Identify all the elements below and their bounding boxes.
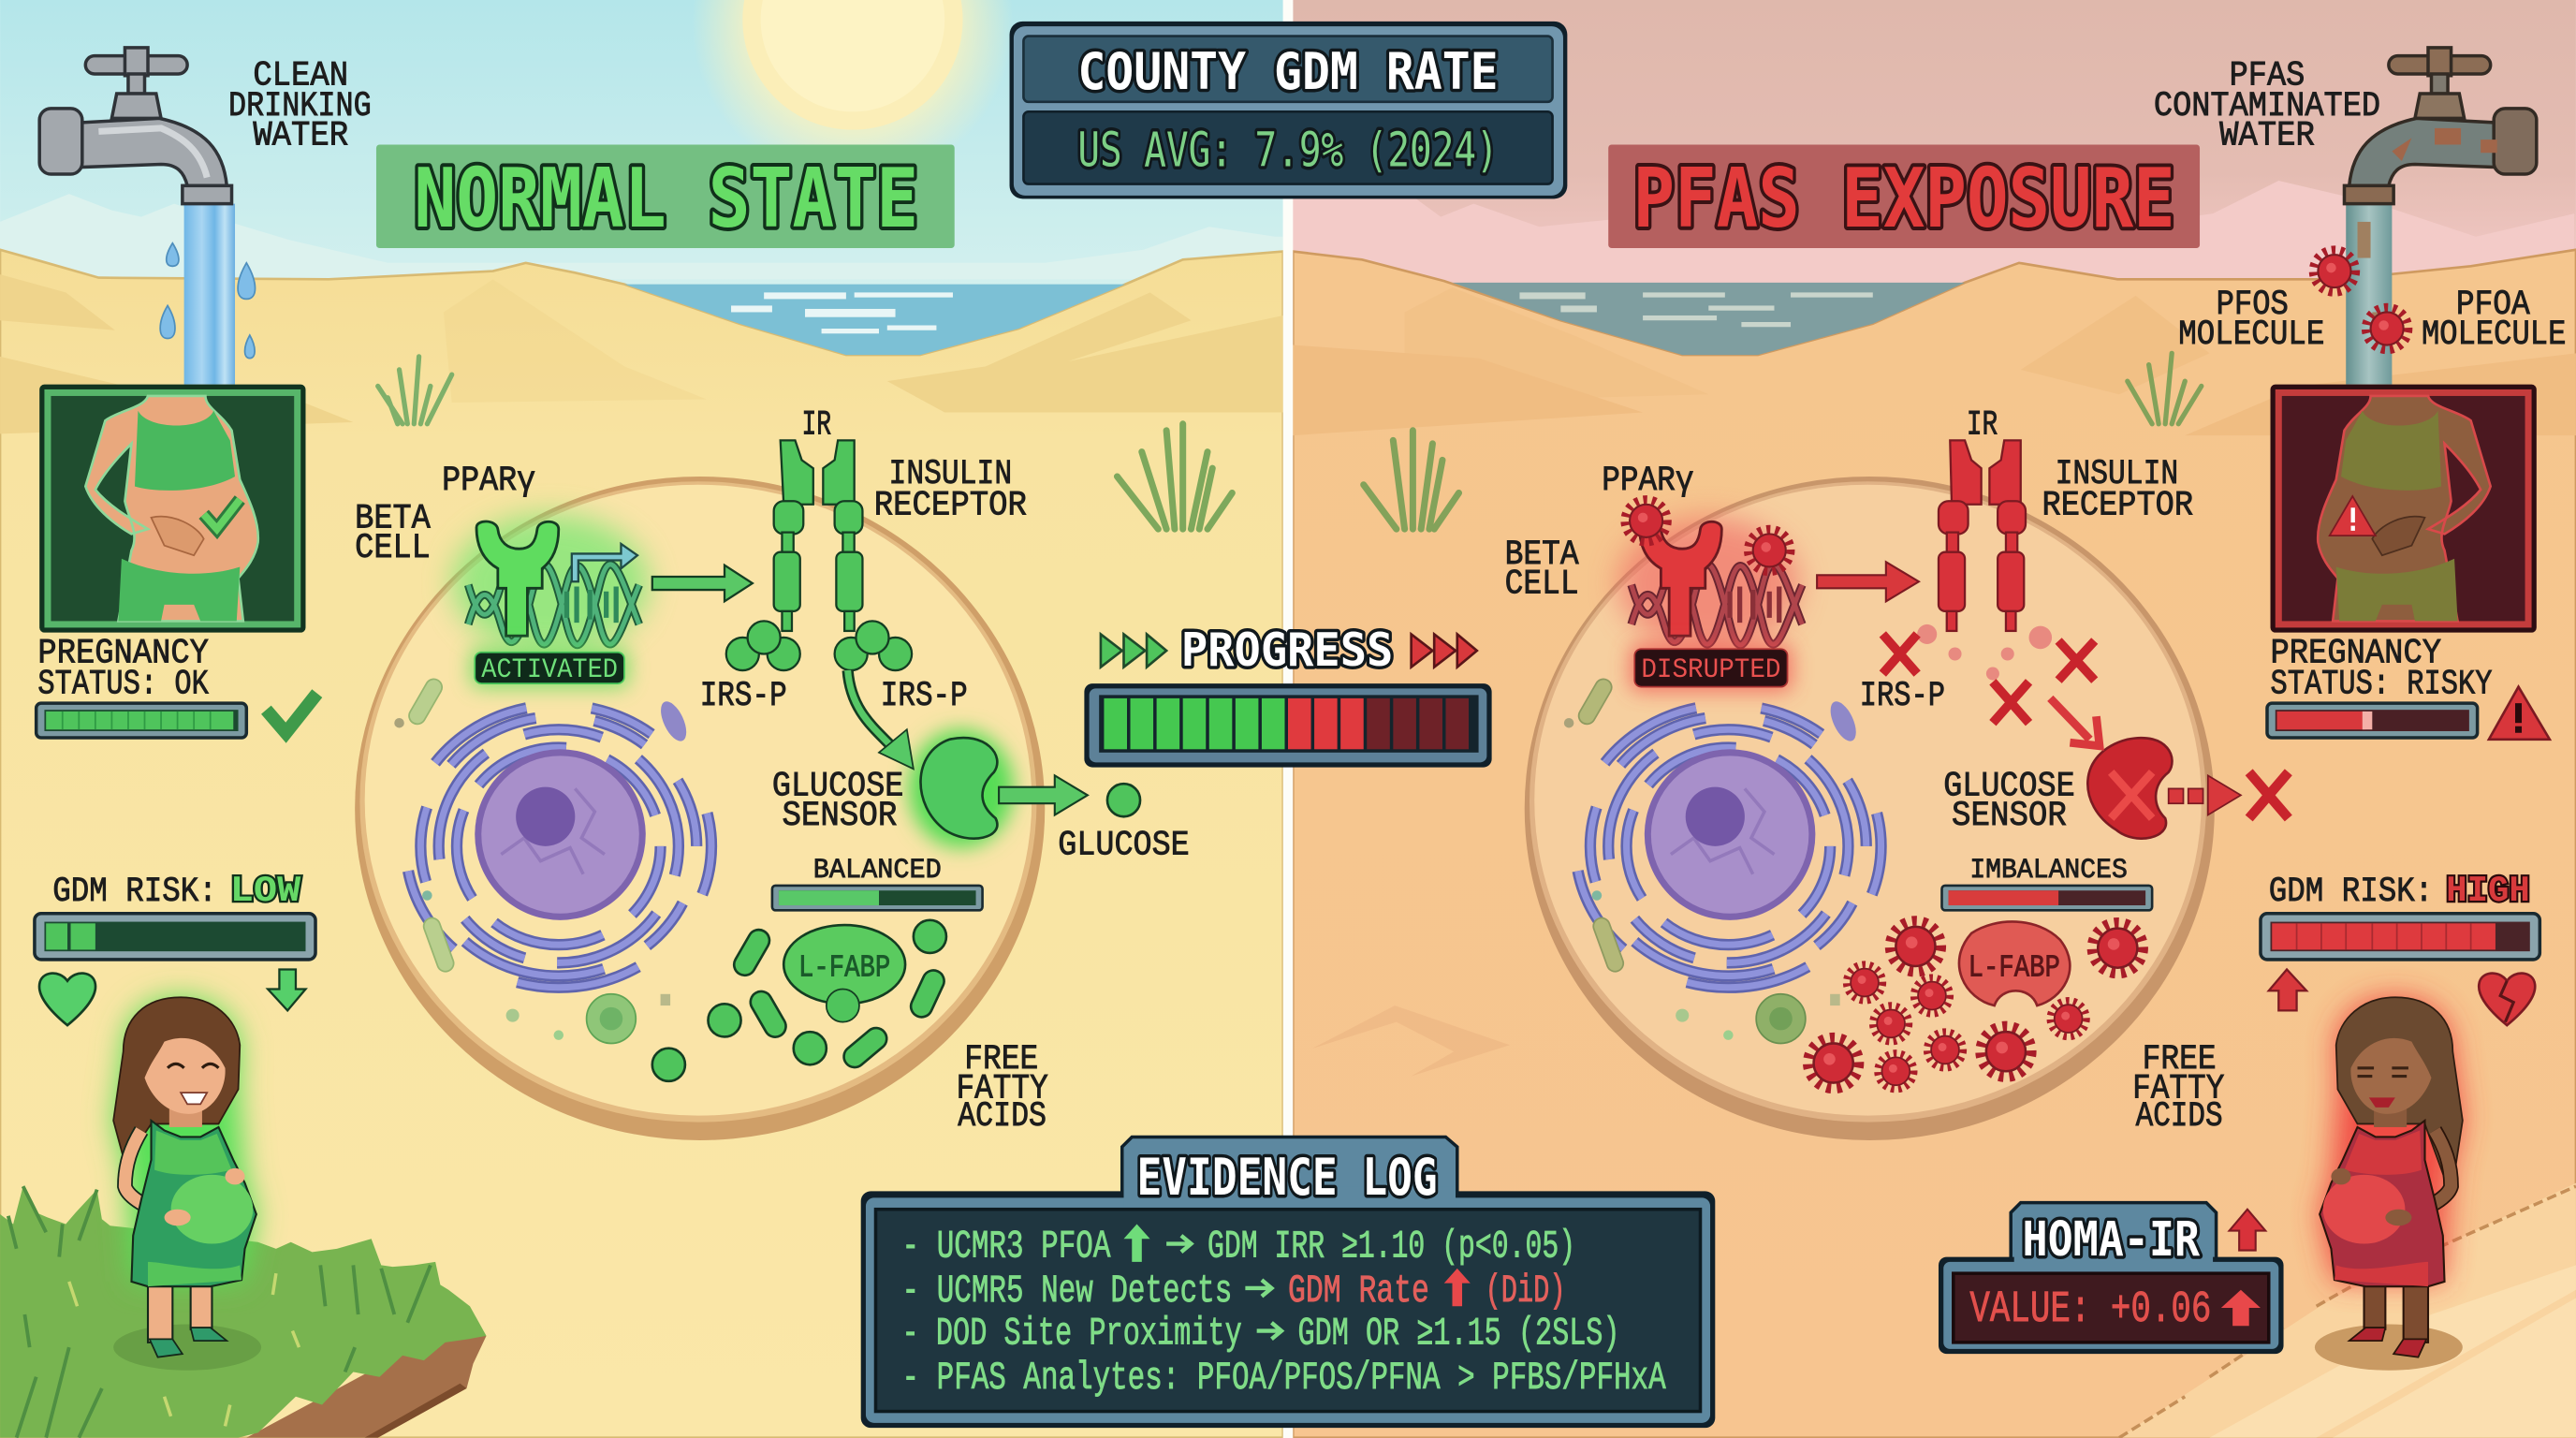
- PFAS on transcription site: [1748, 529, 1791, 572]
- PPAR gamma glow: [452, 514, 649, 653]
- US average text: US AVG: 7.9% (2024): [1077, 123, 1499, 178]
- shadow: [2315, 1325, 2463, 1371]
- label: clean drinking water: DRINKING: [228, 87, 372, 126]
- nucleus and endoplasmic reticulum: [394, 697, 711, 1040]
- labels: left cell: [355, 405, 1190, 1137]
- left clouds: [0, 194, 1283, 279]
- labels: right cell: SENSOR: [1952, 797, 2067, 836]
- warning on belly: [2330, 496, 2376, 536]
- label: pregnancy status OK: STATUS: OK: [37, 666, 210, 705]
- label: PFOA molecule: [2422, 286, 2566, 355]
- right lake: [1453, 283, 1965, 355]
- green chevrons: [1101, 634, 1166, 668]
- label: PFOA molecule: PFOA: [2456, 286, 2531, 325]
- labels: left cell: GLUCOSE: [772, 767, 903, 806]
- labels: left cell: SENSOR: [782, 797, 897, 836]
- title: EVIDENCE LOG: [1137, 1148, 1438, 1207]
- rusty faucet: [2344, 48, 2537, 204]
- water stream: [160, 204, 256, 385]
- left dunes: [0, 274, 1283, 433]
- label: GDM risk low: GDM RISK:: [52, 873, 217, 912]
- left background: sand: [0, 250, 1283, 1438]
- arm fill: [124, 1130, 178, 1217]
- labels: left cell: FATTY: [956, 1069, 1048, 1108]
- woman normal: [113, 997, 261, 1371]
- arm fill: [2398, 1130, 2452, 1217]
- label: clean drinking water: [228, 56, 372, 155]
- right dunes: [1293, 287, 2576, 435]
- panel: progress: [1084, 623, 1492, 768]
- panel: HOMA-IR: [1939, 1203, 2284, 1354]
- heading: PFAS exposure: PFAS EXPOSURE: [1633, 151, 2175, 246]
- labels: right cell: IR: [1967, 405, 1998, 445]
- icon: check OK: [266, 694, 317, 733]
- left beta cell: [355, 477, 1045, 1140]
- arm: [2398, 1130, 2452, 1217]
- icon: broken heart: [2479, 974, 2535, 1025]
- meter: GDM risk high: [2261, 914, 2539, 960]
- pale mitochondria: [406, 676, 456, 974]
- dress highlight: [148, 1130, 242, 1286]
- hand on belly: [2385, 1210, 2411, 1225]
- transcription arrow: [572, 544, 637, 581]
- line 1: GDM IRR ≥1.10 (p<0.05): [1208, 1225, 1575, 1269]
- icon: PFOA molecule: [2365, 307, 2408, 350]
- arrow to sensor: [2050, 698, 2100, 746]
- labels: left cell: CELL: [355, 529, 431, 568]
- right foreground light sand: [2119, 1183, 2576, 1438]
- glucose dot: [1107, 784, 1140, 816]
- right background: sand: [1293, 250, 2576, 1438]
- labels: right cell: RECEPTOR: [2042, 486, 2193, 525]
- panel: pregnancy status right: [2271, 385, 2537, 633]
- label: pregnancy status OK: PREGNANCY: [37, 634, 209, 673]
- neck: [2374, 1104, 2407, 1127]
- torso illustration: [2318, 396, 2491, 621]
- label: PFOS molecule: MOLECULE: [2178, 315, 2324, 355]
- insulin receptor right: [1939, 440, 2026, 631]
- right small dune: [1312, 1005, 1510, 1077]
- labels: left cell: IRS-P: [881, 677, 968, 716]
- title: HOMA-IR: [2022, 1212, 2200, 1268]
- panel: pregnancy status left: [39, 385, 305, 633]
- legs: [2364, 1284, 2428, 1343]
- dress highlight: [2334, 1130, 2428, 1286]
- icon: blocked X: [2249, 772, 2289, 818]
- chip: disrupted: DISRUPTED: [1641, 653, 1781, 685]
- line 3: GDM OR ≥1.15 (2SLS): [1298, 1312, 1620, 1357]
- nucleus and endoplasmic reticulum: [1564, 697, 1881, 1040]
- label: PFAS contaminated water: PFAS: [2230, 56, 2305, 95]
- torso illustration: [85, 396, 258, 621]
- tab: [2011, 1203, 2217, 1265]
- label: pregnancy status risky: STATUS: RISKY: [2271, 666, 2492, 705]
- neck: [169, 1104, 202, 1127]
- value arrow: [2221, 1290, 2261, 1326]
- line 3: - DOD Site Proximity: [902, 1312, 1242, 1357]
- face: [2350, 1038, 2431, 1114]
- label: PFAS contaminated water: CONTAMINATED: [2154, 87, 2380, 126]
- vesicle: [587, 994, 636, 1043]
- labels: right cell: INSULIN: [2056, 455, 2178, 494]
- frame: [1939, 1257, 2284, 1354]
- dress: [131, 1121, 256, 1286]
- labels: left cell: IRS-P: [700, 677, 787, 716]
- faucet: [39, 48, 232, 204]
- labels: right cell: CELL: [1505, 565, 1579, 605]
- value: VALUE: +0.06: [1969, 1285, 2211, 1335]
- hand on belly: [165, 1210, 191, 1225]
- label: PFOS molecule: [2178, 286, 2324, 355]
- pale mitochondria: [1575, 676, 1626, 974]
- hand top: [225, 1168, 245, 1184]
- right beta cell: [1525, 477, 2215, 1140]
- cell membrane: [1525, 477, 2215, 1140]
- icon: heart: [39, 974, 95, 1025]
- label: PFOS molecule: PFOS: [2217, 286, 2289, 325]
- label: GDM risk high: GDM RISK:: [2269, 873, 2433, 912]
- progress bar: [1084, 683, 1492, 768]
- status bar risky: [2267, 703, 2478, 738]
- smile: [181, 1093, 207, 1104]
- meter: GDM risk low: [35, 914, 315, 960]
- shoes: [150, 1328, 227, 1357]
- label: GDM risk high: HIGH: [2446, 871, 2530, 912]
- contaminated stream: [2346, 204, 2392, 385]
- signal arrow to sensor: [848, 670, 914, 769]
- label: pregnancy status risky: [2271, 634, 2492, 705]
- cell membrane: [355, 477, 1045, 1140]
- right tap: contaminated water: [2344, 48, 2537, 385]
- chip: disrupted: [1630, 644, 1793, 692]
- face: [145, 1038, 226, 1114]
- DNA left: [468, 565, 639, 645]
- icon: X on sensor: [2111, 772, 2152, 818]
- insulin receptor left: [774, 440, 862, 631]
- balanced meter: [772, 854, 983, 910]
- labels: left cell: FREE: [964, 1040, 1038, 1079]
- line 2: (DiD): [1486, 1269, 1566, 1313]
- labels: left cell: BETA: [355, 499, 432, 538]
- label: clean drinking water: CLEAN: [253, 56, 348, 95]
- outer frame: [861, 1191, 1715, 1428]
- woman exposed: [2315, 997, 2463, 1371]
- foreground grass and soil: [0, 1186, 487, 1438]
- icon: PFOS molecule: [2313, 250, 2356, 292]
- shoes: [2349, 1328, 2426, 1357]
- DNA right: [1632, 565, 1802, 645]
- arm: [124, 1130, 178, 1217]
- labels: left cell: RECEPTOR: [874, 486, 1027, 525]
- balanced meter: BALANCED: [813, 854, 942, 886]
- labels: left cell: INSULIN: [889, 455, 1012, 494]
- glucose sensor glow: [909, 729, 1014, 848]
- labels: left cell: ACIDS: [958, 1097, 1046, 1137]
- labels: right cell: BETA: [1505, 536, 1579, 575]
- labels: right cell: IRS-P: [1860, 677, 1945, 716]
- IRS-P clusters left: [726, 621, 912, 670]
- line 2: GDM Rate: [1288, 1269, 1429, 1313]
- dashed blocked arrow: [2169, 775, 2241, 814]
- labels: left cell: PPARγ: [442, 462, 535, 501]
- progress title: PROGRESS: [1181, 623, 1393, 677]
- woman exposed glow: [2320, 997, 2463, 1282]
- L-FABP protein disrupted: [1959, 921, 2070, 1005]
- label: clean drinking water: WATER: [253, 116, 348, 155]
- belly: [171, 1175, 253, 1244]
- broken IRS-P debris and X marks: [1882, 624, 2095, 723]
- tired eyes: [2358, 1068, 2408, 1077]
- fatty acid organelles: [652, 920, 947, 1081]
- left lake: [624, 285, 1125, 355]
- labels: right cell: FREE: [2143, 1040, 2217, 1079]
- label: PFAS contaminated water: WATER: [2219, 116, 2315, 155]
- label: GDM risk low: LOW: [230, 871, 301, 912]
- mouth: [2369, 1097, 2395, 1108]
- icon: sun: [692, 0, 1014, 184]
- icon: arrow down: [268, 969, 305, 1010]
- hair: [2336, 997, 2463, 1196]
- PPAR gamma glow right: [1618, 518, 1799, 649]
- tab: [1122, 1137, 1457, 1201]
- left grass tufts: [378, 357, 1232, 529]
- PPAR gamma receptor right: [1640, 521, 1721, 636]
- belly: [2323, 1175, 2405, 1244]
- labels: left cell: IR: [802, 405, 831, 445]
- right grass tufts: [1364, 353, 2202, 529]
- shadow: [113, 1325, 261, 1371]
- heading: normal state: NORMAL STATE: [414, 151, 918, 246]
- line 4: - PFAS Analytes: PFOA/PFOS/PFNA > PFBS/PFHxA: [902, 1356, 1666, 1401]
- labels: right cell: ACIDS: [2136, 1097, 2223, 1137]
- label: GDM risk high: [2269, 871, 2530, 912]
- glucose sensor disrupted: [2087, 738, 2172, 839]
- label: pregnancy status risky: PREGNANCY: [2271, 634, 2441, 673]
- icon: warning: [2489, 687, 2550, 740]
- labels: left cell: GLUCOSE: [1058, 827, 1190, 866]
- right background: sky: [1293, 0, 2576, 287]
- icon: HOMA-IR rising arrow: [2230, 1210, 2265, 1251]
- L-FABP protein disrupted: L-FABP: [1969, 950, 2060, 986]
- PPAR gamma receptor left: [476, 521, 559, 636]
- line 2: [902, 1269, 1566, 1313]
- labels: right cell: FATTY: [2132, 1069, 2224, 1108]
- PFAS particles in cell: [1808, 921, 2144, 1090]
- label: PFAS contaminated water: [2154, 56, 2380, 155]
- legs: [148, 1284, 212, 1343]
- line 1: [902, 1224, 1575, 1269]
- dress: [2320, 1121, 2445, 1286]
- arrow to receptor: [652, 565, 753, 601]
- central divider: [1283, 0, 1293, 1438]
- labels: right cell: PPARγ: [1602, 462, 1693, 501]
- eyes and smile: [168, 1064, 218, 1068]
- left tap: clean drinking water: [39, 48, 256, 385]
- line 3: [902, 1312, 1620, 1357]
- arrow to receptor: [1817, 562, 1919, 601]
- PFAS on PPAR: [1625, 500, 1667, 542]
- right clouds: [1293, 181, 2574, 287]
- icon: arrow up: [2269, 969, 2306, 1010]
- imbalances meter: IMBALANCES: [1969, 854, 2128, 886]
- label: pregnancy status OK: [37, 634, 210, 705]
- line 2: - UCMR5 New Detects: [902, 1269, 1232, 1313]
- left background: sky: [0, 0, 1283, 287]
- red chevrons: [1412, 634, 1477, 668]
- chip: activated: ACTIVATED: [481, 653, 618, 685]
- L-FABP protein: L-FABP: [798, 950, 890, 986]
- woman normal glow: [113, 997, 256, 1282]
- labels: right cell: [1505, 405, 2224, 1137]
- arrow: glucose out: [999, 775, 1088, 814]
- imbalances meter: [1942, 854, 2152, 910]
- L-FABP protein: [783, 925, 905, 1022]
- line 1: - UCMR3 PFOA: [902, 1225, 1111, 1269]
- title text: COUNTY GDM RATE: [1077, 42, 1499, 101]
- check mark on belly: [204, 500, 240, 529]
- labels: right cell: GLUCOSE: [1943, 767, 2075, 806]
- hand top: [2331, 1168, 2351, 1184]
- vesicle: [1756, 994, 1806, 1043]
- panel: evidence log: [861, 1137, 1715, 1428]
- panel: county GDM rate: [1010, 22, 1567, 198]
- glucose sensor: [920, 738, 997, 839]
- status bar OK: [37, 703, 246, 738]
- hair: [113, 997, 240, 1164]
